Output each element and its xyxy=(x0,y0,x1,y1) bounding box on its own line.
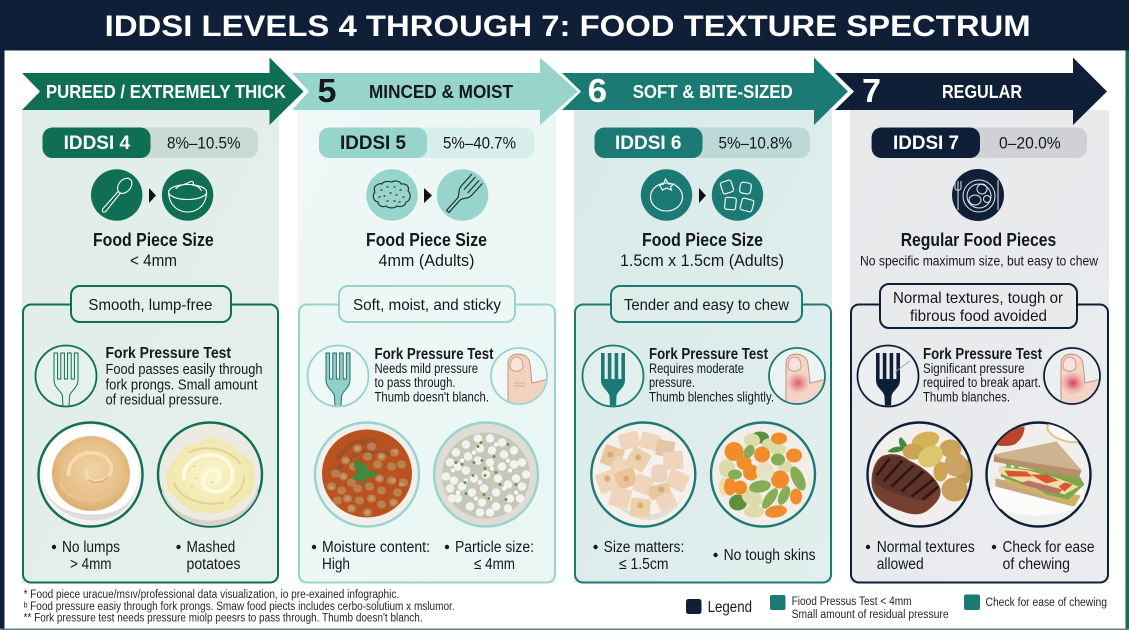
fork pressure text xyxy=(649,346,774,404)
fork pressure text: required to break apart. xyxy=(923,375,1041,390)
inner card frame xyxy=(851,304,1108,582)
callout: soft moist: Soft, moist, and sticky xyxy=(353,297,501,314)
bullet: size matters xyxy=(593,539,684,573)
fork pressure text: Thumb blenches slightly. xyxy=(649,390,774,404)
bullet: no lumps xyxy=(52,539,120,573)
food photo: minced meat xyxy=(315,422,419,526)
fork pressure text: Requires moderate xyxy=(649,361,744,376)
food piece size xyxy=(366,230,487,270)
bullet: no lumps: No lumps xyxy=(62,539,120,556)
bullet: normal textures: Normal textures xyxy=(877,539,975,556)
level 7 range pill: IDDSI 7 xyxy=(893,133,959,154)
bullet: check for ease: Check for ease xyxy=(1002,539,1094,556)
icon: regular plate xyxy=(952,169,1004,221)
food piece size: Food Piece Size xyxy=(366,230,487,250)
panel: IDDSI 4 pureed xyxy=(22,110,279,583)
legend: Small amount of residual pressure xyxy=(792,609,949,621)
bullet: particle size: ≤ 4mm xyxy=(474,556,515,573)
title banner xyxy=(0,0,1129,50)
level 6 range pill: IDDSI 6 xyxy=(615,133,682,154)
arrow: level 5: MINCED & MOIST xyxy=(369,82,513,102)
icon: minced food to fork xyxy=(366,169,488,221)
fork pressure text: Fork Pressure Test xyxy=(374,346,494,363)
inner card frame xyxy=(23,304,278,582)
footnotes: * Food piece uracue/msıv/professional data visualization, io pre-exained infographic. xyxy=(24,589,399,601)
bullet: mashed potatoes: Mashed xyxy=(186,539,235,556)
food piece size: Food Piece Size xyxy=(93,230,214,250)
regular food pieces: No specific maximum size, but easy to chew xyxy=(860,252,1099,268)
icon: fork navy xyxy=(858,346,918,407)
icon: thumb blanches xyxy=(1044,348,1102,406)
icon: tomato to cubes xyxy=(641,169,763,221)
food photo: puree in bowl xyxy=(38,422,142,526)
inner card frame xyxy=(299,304,555,582)
bullet: particle size: Particle size: xyxy=(455,539,534,556)
arrow: level 5: 5 xyxy=(318,72,336,109)
food photo: steak and potatoes xyxy=(868,422,972,526)
bullet: no lumps: > 4mm xyxy=(70,556,112,573)
callout: tender: Tender and easy to chew xyxy=(624,297,789,314)
fork pressure text: Thumb blanches. xyxy=(923,390,1010,404)
bullet: moisture: High xyxy=(322,556,350,573)
fork pressure text xyxy=(923,346,1043,404)
legend: Check for ease of chewing xyxy=(986,597,1107,609)
callout: normal textures: Normal textures, tough or xyxy=(893,290,1064,307)
callout: smooth: Smooth, lump-free xyxy=(88,297,212,314)
food piece size: Food Piece Size xyxy=(642,230,763,250)
food photo: sandwich xyxy=(986,419,1090,526)
food piece size: 4mm (Adults) xyxy=(378,252,474,270)
bullet: no tough skins: No tough skins xyxy=(724,547,816,564)
arrow: level 7 xyxy=(835,58,1107,125)
icon: fork light teal xyxy=(308,346,368,407)
fork pressure text: to pass through. xyxy=(374,375,456,390)
fork pressure text: Significant pressure xyxy=(923,361,1024,376)
fork pressure text: Food passes easily through xyxy=(106,361,262,378)
panel: IDDSI 5 minced and moist xyxy=(298,110,556,583)
fork pressure text: fork prongs. Small amount xyxy=(106,376,258,394)
icon: fork teal xyxy=(582,346,644,407)
fork pressure text: Needs mild pressure xyxy=(374,361,478,376)
fork pressure text: pressure. xyxy=(649,375,695,390)
bullet: mashed potatoes: potatoes xyxy=(186,556,241,573)
arrow: level 6: 6 xyxy=(588,72,607,109)
arrow: level 4 xyxy=(22,58,304,125)
title banner: IDDSI LEVELS 4 THROUGH 7: FOOD TEXTURE SPECTRUM xyxy=(105,10,1031,43)
callout: smooth xyxy=(71,286,231,322)
panel: IDDSI 7 regular xyxy=(850,110,1109,583)
legend: Legend xyxy=(708,599,752,616)
food photo: soft vegetables xyxy=(711,422,815,526)
fork pressure text: of residual pressure. xyxy=(106,392,222,408)
footnotes xyxy=(24,589,455,624)
arrow: level 7: REGULAR xyxy=(942,82,1022,102)
level 5 range pill xyxy=(319,128,534,158)
arrow: level 6 xyxy=(562,58,848,125)
food photo: chicken cubes xyxy=(591,422,695,526)
food piece size: < 4mm xyxy=(130,252,177,270)
icon: spoon to bowl xyxy=(91,169,213,221)
icon: fork outline xyxy=(36,346,96,407)
arrow: level 7: 7 xyxy=(862,72,881,109)
food piece size xyxy=(620,230,784,270)
arrow: level 6: SOFT & BITE-SIZED xyxy=(633,82,793,102)
callout: normal textures xyxy=(880,284,1077,328)
level 7 range pill: 0–20.0% xyxy=(999,134,1061,152)
regular food pieces xyxy=(860,230,1099,268)
level 5 range pill: 5%–40.7% xyxy=(443,134,516,152)
callout: normal textures: fibrous food avoided xyxy=(910,308,1047,325)
fork pressure text: Fork Pressure Test xyxy=(106,345,232,362)
food photo: minced rice xyxy=(434,422,538,526)
level 5 range pill: IDDSI 5 xyxy=(340,133,406,154)
bullet: check for ease xyxy=(992,539,1094,573)
fork pressure text: Thumb doesn't blanch. xyxy=(374,390,489,404)
bullet: size matters: ≤ 1.5cm xyxy=(619,556,668,573)
level 4 range pill: IDDSI 4 xyxy=(64,133,131,154)
legend xyxy=(686,594,1107,621)
level 6 range pill: 5%–10.8% xyxy=(718,134,792,152)
bullet: check for ease: of chewing xyxy=(1002,556,1070,573)
bullet: size matters: Size matters: xyxy=(604,539,684,556)
level 4 range pill: 8%–10.5% xyxy=(167,134,241,152)
level 7 range pill xyxy=(872,128,1087,158)
bullet: moisture xyxy=(312,539,430,573)
fork pressure text xyxy=(106,345,262,408)
bullet: particle size xyxy=(445,539,534,573)
icon: thumb slight blanch xyxy=(769,348,827,406)
callout: soft moist xyxy=(339,286,515,322)
arrow: level 5 xyxy=(292,58,578,125)
footnotes: ** Fork pressure test needs pressure miolp peesrs to pass through. Thumb doesn't blanch. xyxy=(24,612,423,624)
regular food pieces: Regular Food Pieces xyxy=(901,230,1056,250)
fork pressure text: Fork Pressure Test xyxy=(923,346,1043,363)
callout: tender xyxy=(611,286,802,322)
fork pressure text xyxy=(374,346,494,404)
bullet: mashed potatoes xyxy=(176,539,241,573)
icon: thumb no blanch xyxy=(491,348,549,406)
level 6 range pill xyxy=(594,128,810,158)
food photo: mashed potatoes xyxy=(158,422,262,530)
food piece size: 1.5cm x 1.5cm (Adults) xyxy=(620,252,784,270)
bullet: normal textures: allowed xyxy=(877,556,924,573)
food piece size xyxy=(93,230,214,270)
arrow: level 4: PUREED / EXTREMELY THICK xyxy=(46,82,286,102)
bullet: normal textures xyxy=(866,539,975,573)
fork pressure text: Fork Pressure Test xyxy=(649,346,769,363)
bullet: moisture: Moisture content: xyxy=(322,539,430,556)
panel: IDDSI 6 soft and bite-sized xyxy=(574,110,832,583)
footnotes: ᵇ Food pressure easiy through fork prongs. Smaw food piects includes cerbo-solutium x mslumor. xyxy=(24,601,455,613)
legend: Fiood Pressus Test < 4mm xyxy=(792,596,912,608)
level 4 range pill xyxy=(42,128,258,158)
inner card frame xyxy=(575,304,831,582)
